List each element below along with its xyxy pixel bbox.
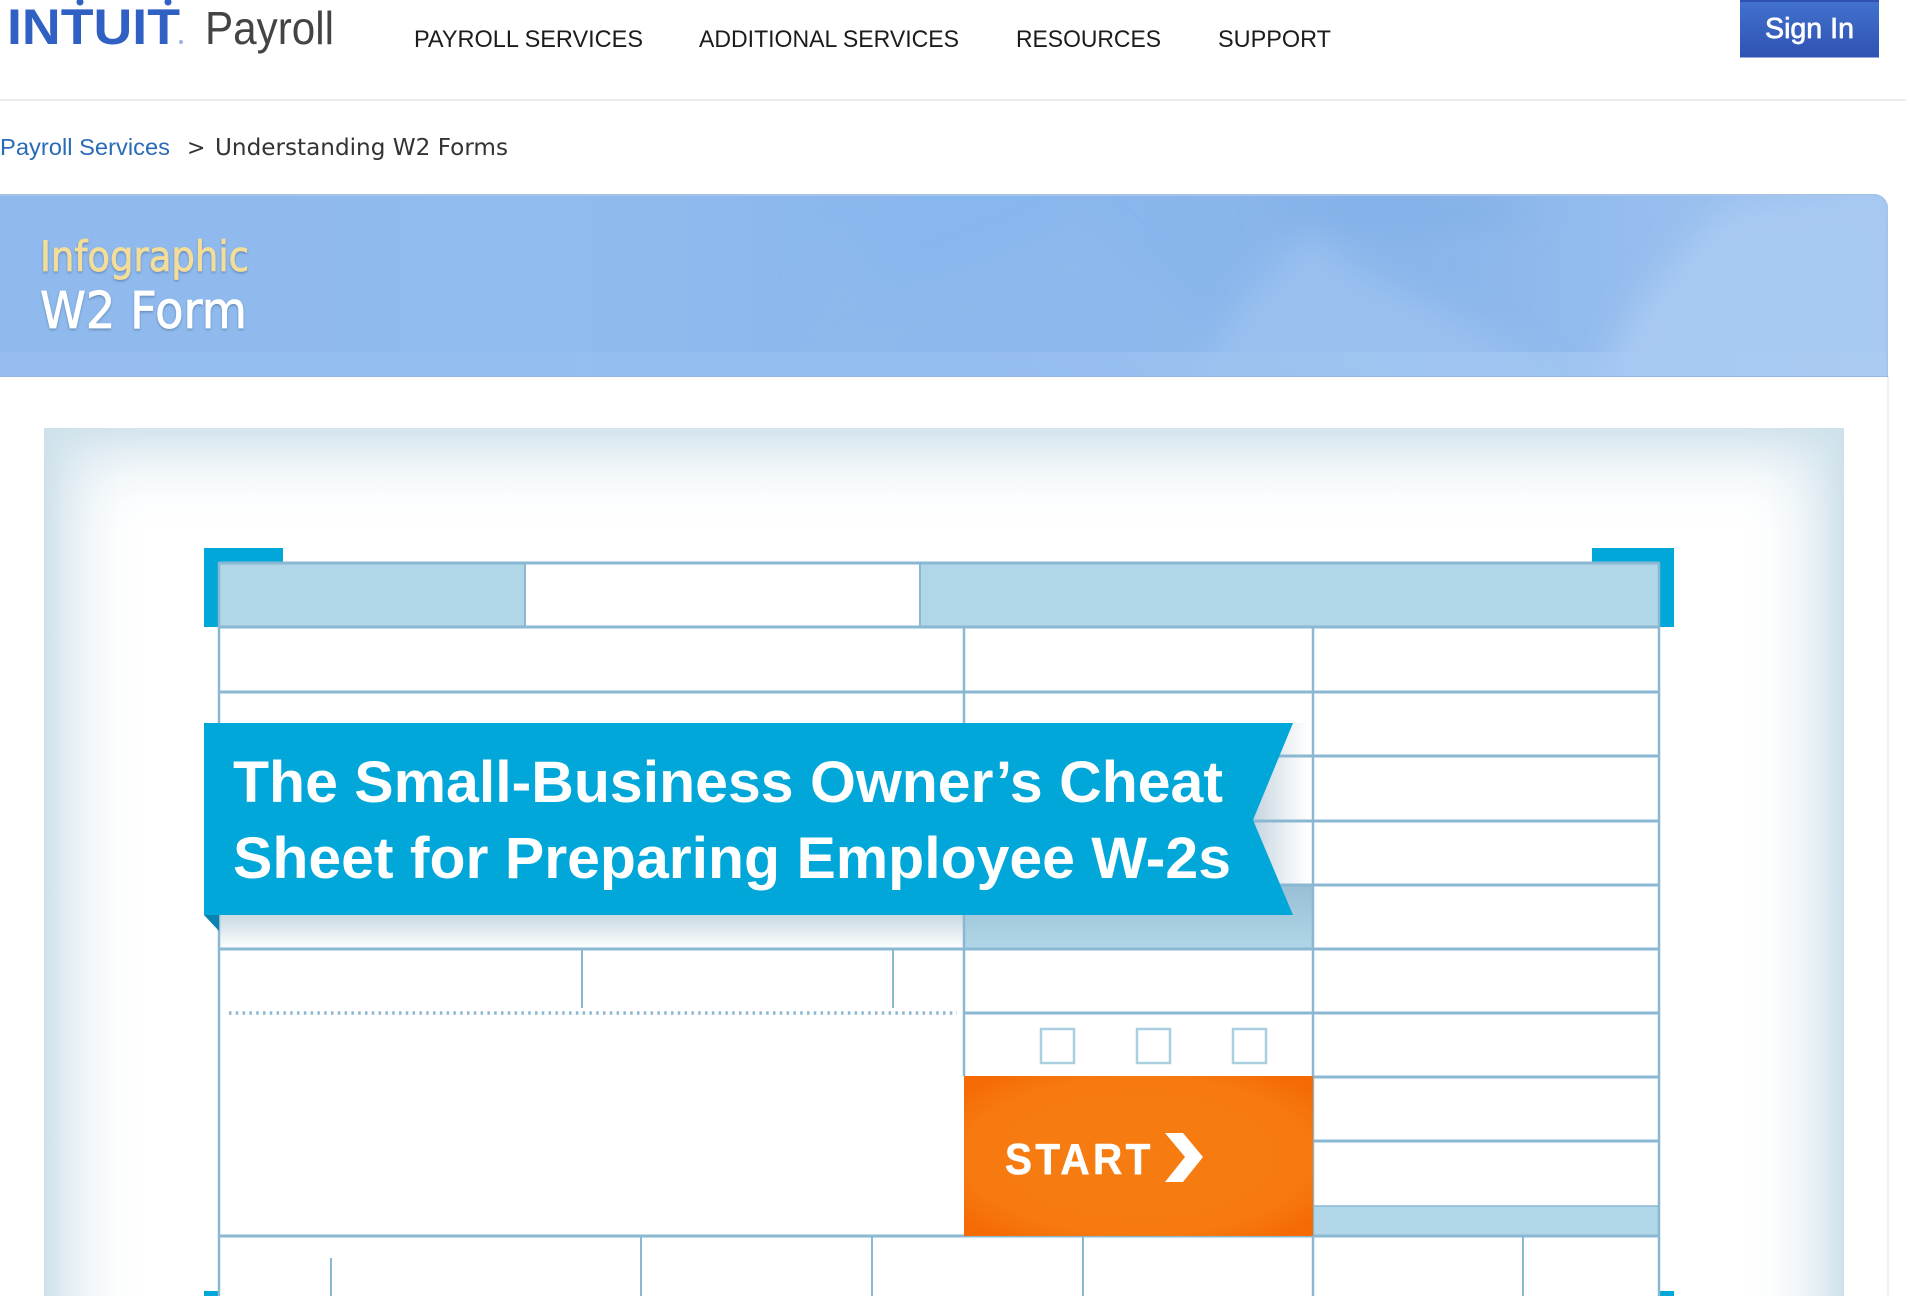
W-2 form graphic [204, 548, 1674, 1296]
form header row [219, 562, 1659, 627]
hero banner [0, 194, 1888, 377]
icon: chevron arrow [1165, 1133, 1203, 1182]
logo: Intuit Payroll: INTUIT [7, 0, 180, 55]
breadcrumb: Payroll Services [0, 134, 170, 160]
heading: W2 Form: W2 Form [40, 282, 247, 341]
corner marks [204, 548, 1674, 1296]
navigation menu: ADDITIONAL SERVICES [699, 26, 959, 53]
logo: Intuit Payroll [7, 0, 334, 55]
breadcrumb: > [187, 136, 205, 161]
navigation menu [414, 26, 1331, 53]
navigation menu: SUPPORT [1218, 26, 1331, 53]
navigation menu: PAYROLL SERVICES [414, 26, 643, 53]
start button: START [1005, 1134, 1151, 1183]
shaded form cells [219, 723, 1659, 1236]
title ribbon [204, 723, 1293, 931]
dotted line [229, 1011, 957, 1015]
title text: Sheet for Preparing Employee W-2s [233, 826, 1231, 891]
navigation menu: RESOURCES [1016, 26, 1161, 53]
breadcrumb: Understanding W2 Forms [215, 135, 508, 161]
title text [233, 750, 1231, 891]
start button [964, 1076, 1313, 1236]
logo: Intuit Payroll: Payroll [205, 2, 334, 54]
breadcrumb [0, 134, 508, 161]
checkboxes [1041, 1029, 1266, 1063]
sign in button: Sign In [1765, 13, 1854, 45]
panel: infographic card background [44, 428, 1844, 1296]
sign in button [1740, 0, 1879, 58]
heading: Infographic: Infographic [40, 232, 249, 281]
title text: The Small-Business Owner’s Cheat [233, 750, 1223, 815]
form grid lines [219, 562, 1659, 1296]
